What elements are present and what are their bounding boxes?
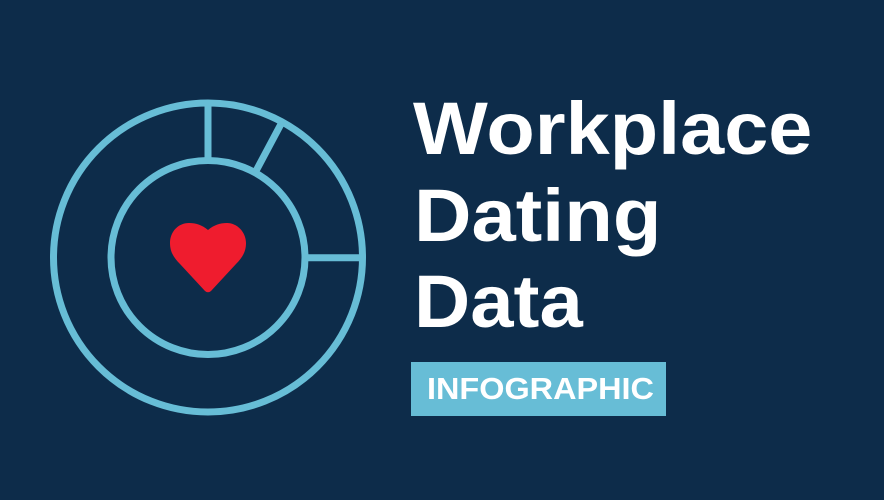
badge: infographic: [411, 362, 666, 416]
title: [413, 87, 812, 343]
title: Data: [414, 260, 583, 343]
title: Workplace: [413, 87, 812, 170]
badge: infographic: INFOGRAPHIC: [426, 372, 653, 406]
icon: donut chart with heart: [50, 100, 366, 416]
title: Dating: [414, 174, 661, 257]
